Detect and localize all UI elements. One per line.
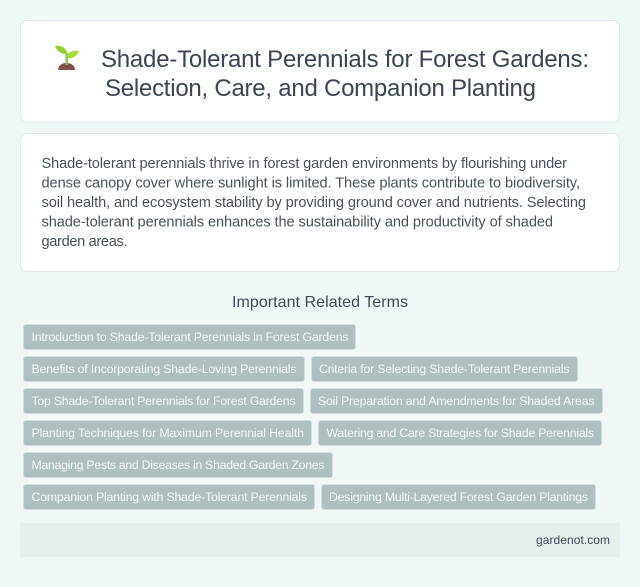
tag: benefits [24,356,304,382]
description text: garden areas. [42,234,128,250]
tag: pests and diseases: Managing Pests and Diseases in Shaded Garden Zones [32,458,324,472]
footer: gardenot.com [536,533,610,547]
tag: criteria [312,356,578,382]
panel: title card [20,20,620,122]
tag: introduction [24,324,356,350]
description text: soil health, and ecosystem stability by providing ground cover and nutrients. Selecting [42,195,586,211]
tag: pests and diseases [24,452,332,478]
tag: benefits: Benefits of Incorporating Shade-Loving Perennials [32,362,296,376]
heading: important related terms: Important Related Terms [232,294,408,311]
tag: soil preparation: Soil Preparation and Amendments for Shaded Areas [318,394,594,408]
description text: Shade-tolerant perennials thrive in forest garden environments by flourishing under [42,156,567,172]
tag: soil preparation [310,388,602,414]
description text [42,156,586,250]
title text [101,46,589,102]
tag: planting techniques [24,420,312,446]
tag: watering and care [318,420,602,446]
tag: introduction: Introduction to Shade-Tolerant Perennials in Forest Gardens [32,330,348,344]
description text: shade-tolerant perennials enhances the sustainability and productivity of shaded [42,214,553,230]
title text: Shade-Tolerant Perennials for Forest Gardens: [101,46,589,73]
tag: companion planting: Companion Planting with Shade-Tolerant Perennials [32,490,307,504]
panel: description card [20,134,620,272]
tag: criteria: Criteria for Selecting Shade-Tolerant Perennials [319,362,570,376]
tag: top perennials: Top Shade-Tolerant Perennials for Forest Gardens [32,394,296,408]
tag: multi-layered design [322,484,596,510]
footer [20,523,620,557]
panel: related term tags [24,324,602,510]
tag: watering and care: Watering and Care Strategies for Shade Perennials [326,426,594,440]
tag: planting techniques: Planting Techniques for Maximum Perennial Health [32,426,304,440]
tag: multi-layered design: Designing Multi-Layered Forest Garden Plantings [329,490,588,504]
tag: top perennials [24,388,304,414]
tag: companion planting [24,484,314,510]
icon: seedling [55,46,79,70]
title text: Selection, Care, and Companion Planting [105,75,536,102]
description text: dense canopy cover where sunlight is limited. These plants contribute to biodiversity, [42,176,580,192]
